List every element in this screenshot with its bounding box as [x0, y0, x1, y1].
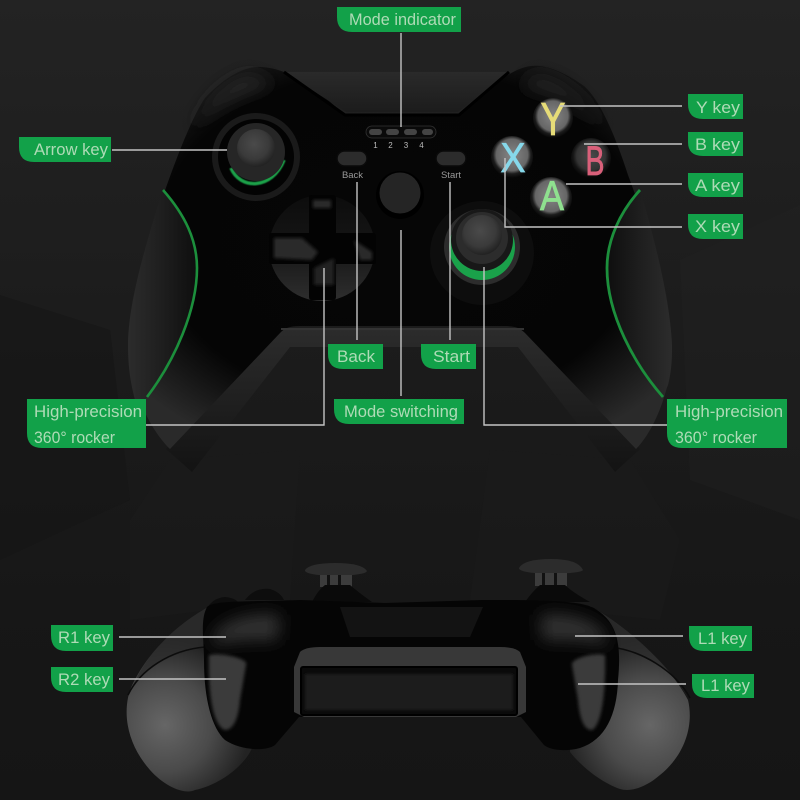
label: L1 key upper [689, 626, 752, 651]
label: R1 key: R1 key [58, 628, 110, 647]
grip seams [128, 647, 690, 698]
mode indicator LEDs [366, 126, 436, 150]
shoulder bumps [206, 589, 284, 610]
label: High-precision right [667, 399, 787, 448]
right thumbstick [519, 559, 590, 602]
battery panel [301, 667, 517, 715]
label: L1 key lower [692, 674, 754, 698]
X button [491, 134, 533, 181]
d-pad [269, 195, 376, 301]
front view controller [128, 66, 672, 472]
label: X key [688, 214, 743, 239]
label: R2 key [51, 667, 113, 692]
left thumbstick [305, 563, 372, 602]
B button: B [586, 137, 604, 184]
label: B key [688, 132, 743, 156]
bridge and legs [166, 328, 640, 472]
label: L1 key upper: L1 key [698, 629, 747, 648]
B button [571, 137, 611, 184]
mode indicator LEDs: 4 [419, 141, 424, 150]
label: A key: A key [695, 176, 741, 195]
label: X key: X key [695, 217, 741, 236]
leader lines [112, 33, 686, 684]
back button [337, 151, 367, 181]
label: High-precision left: High-precision [34, 402, 142, 421]
label: R2 key: R2 key [58, 670, 110, 689]
label: High-precision left: 360° rocker [34, 428, 115, 447]
top rim [284, 72, 509, 115]
label: Arrow key: Arrow key [34, 140, 108, 159]
left stick [212, 113, 300, 201]
upper grip shade right [590, 606, 688, 698]
lower left bumper [209, 654, 246, 730]
start button: Start [441, 170, 461, 181]
label: Mode switching: Mode switching [344, 402, 458, 421]
A button [530, 172, 572, 219]
left grip [128, 190, 197, 410]
label: B key: B key [695, 135, 741, 154]
label: R1 key [51, 625, 113, 651]
upper grip shade left [130, 606, 210, 692]
controller body [128, 66, 672, 449]
left trigger highlight [211, 614, 280, 646]
label: High-precision right: High-precision [675, 402, 783, 421]
top bumper panel [284, 72, 509, 112]
Y button: Y [540, 93, 566, 145]
label: Back [328, 344, 383, 369]
label: A key [688, 173, 743, 197]
mode indicator LEDs: 1 [373, 141, 378, 150]
center shell [203, 600, 619, 750]
left green line [147, 190, 197, 397]
label: Arrow key [19, 137, 111, 162]
mode switching button [376, 171, 424, 219]
back button: Back [342, 170, 363, 181]
X button: X [500, 134, 526, 181]
rear view controller [127, 559, 690, 791]
label: Start [421, 344, 476, 369]
right stick [430, 201, 534, 305]
A button: A [540, 172, 564, 219]
start button [436, 151, 466, 181]
right green line [607, 190, 663, 397]
label: High-precision left [27, 399, 146, 448]
lower right bumper [572, 654, 605, 730]
label: High-precision right: 360° rocker [675, 428, 757, 447]
center grey bezel [294, 647, 526, 717]
mode indicator LEDs: 2 [388, 141, 393, 150]
label: L1 key lower: L1 key [701, 676, 750, 695]
right grip [607, 190, 672, 397]
left grip [127, 606, 252, 791]
top bar [340, 607, 483, 637]
label: Start: Start [433, 347, 470, 366]
right trigger highlight [540, 614, 608, 646]
label: Mode indicator: Mode indicator [349, 10, 456, 29]
right grip [570, 606, 690, 790]
shoulder highlights [192, 74, 275, 130]
label: Back: Back [337, 347, 375, 366]
label: Mode switching [334, 399, 464, 424]
label: Mode indicator [337, 7, 461, 32]
label: Y key [688, 94, 743, 119]
label: Y key: Y key [696, 98, 741, 117]
mode indicator LEDs: 3 [404, 141, 409, 150]
lower bridge edge [281, 328, 524, 330]
